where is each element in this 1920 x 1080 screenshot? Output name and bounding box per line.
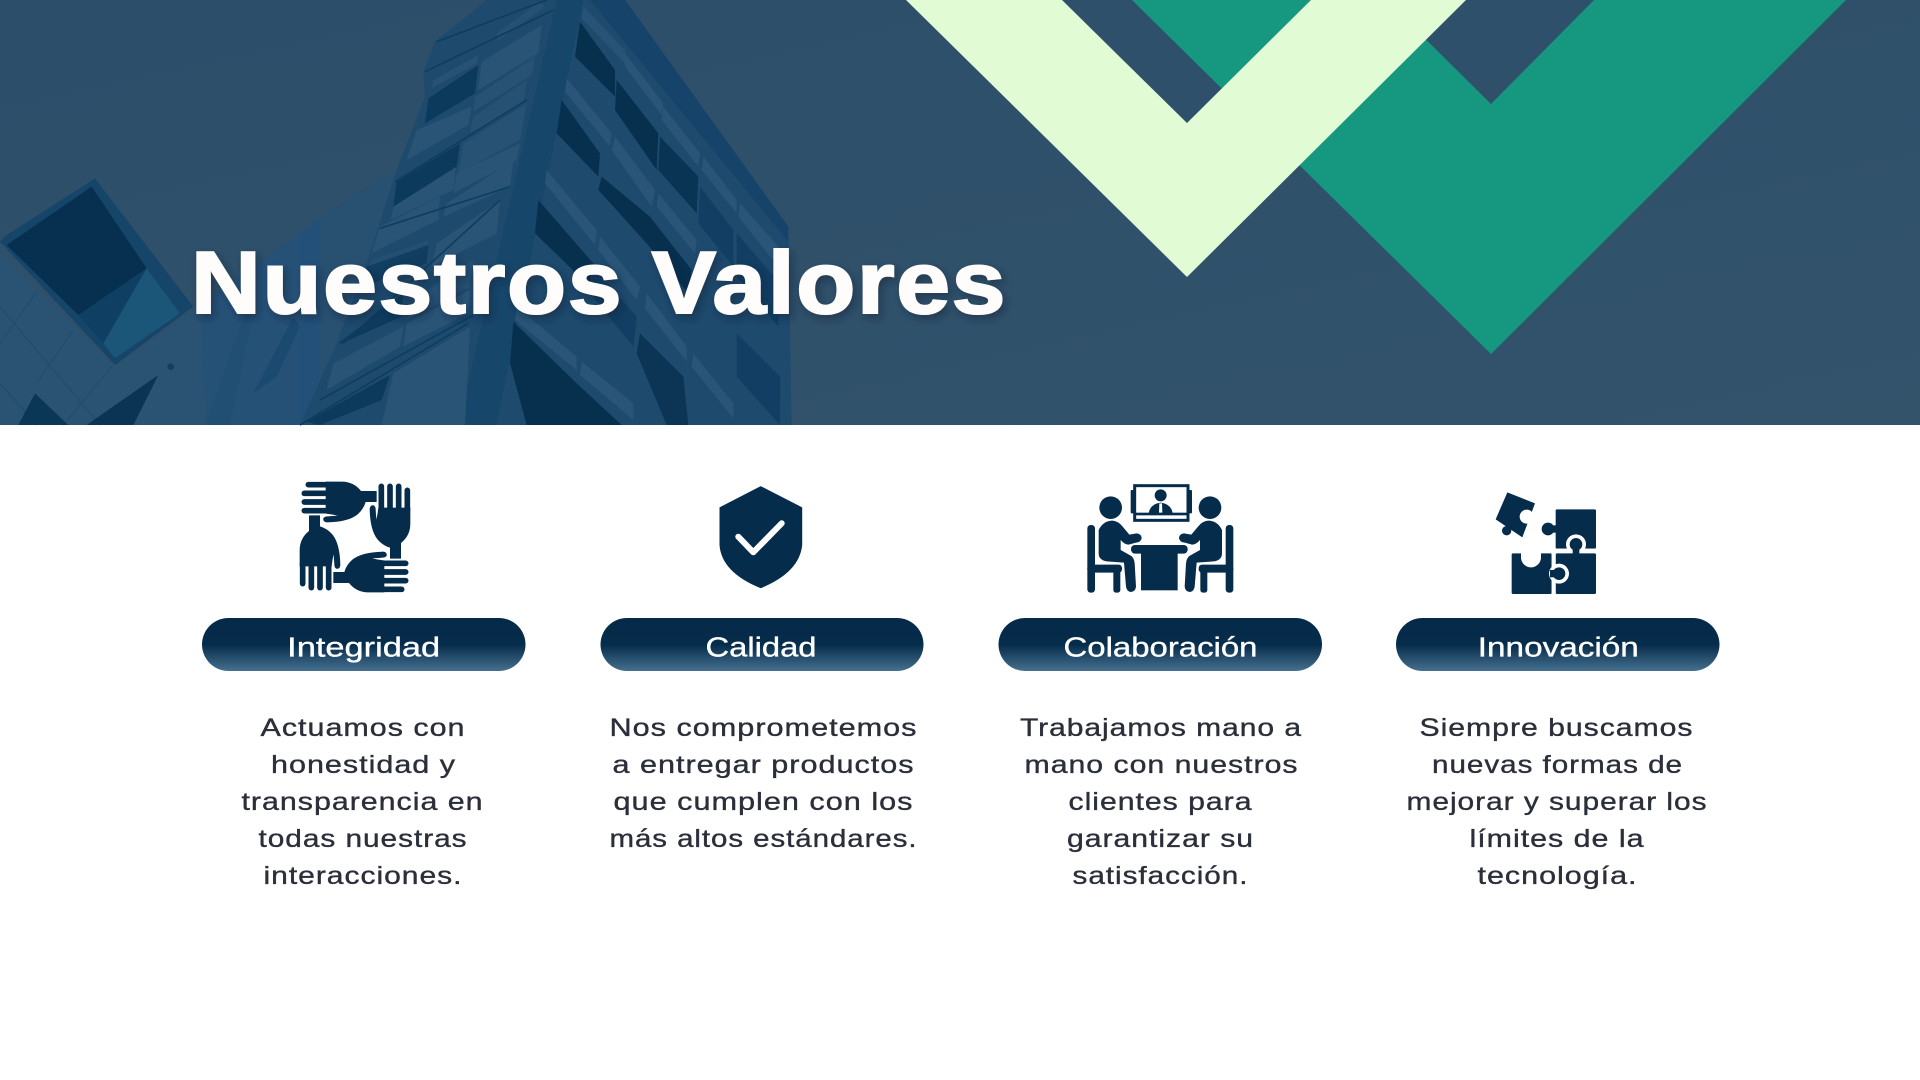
text: Innovación description: tecnología. [1478, 862, 1638, 890]
table [1131, 545, 1188, 590]
column: Colaboración [998, 486, 1322, 890]
title: Nuestros Valores [191, 233, 1007, 332]
pill: Colaboración [998, 618, 1322, 671]
loose top-left piece [1496, 492, 1535, 537]
green chevron [1132, 0, 1846, 354]
text: Integridad description: transparencia en [242, 788, 484, 816]
icon: puzzle pieces [1496, 492, 1596, 594]
monitor [1131, 486, 1192, 520]
top-right piece [1542, 509, 1596, 549]
text: Integridad description: honestidad y [271, 751, 456, 779]
text: Colaboración description [1020, 714, 1302, 890]
icon: shield with check [720, 487, 802, 588]
banner background [0, 0, 1920, 425]
text: Calidad description: que cumplen con los [614, 788, 914, 816]
column: Integridad [202, 482, 526, 890]
column: Calidad [600, 487, 924, 853]
text: Innovación description: nuevas formas de [1432, 751, 1683, 779]
text: Integridad description: interacciones. [264, 862, 462, 890]
text: Innovación description: mejorar y superar los [1406, 788, 1708, 816]
bottom-right piece [1556, 534, 1596, 594]
building photo: main tower [300, 0, 792, 425]
light mint chevron [906, 0, 1466, 277]
text: Innovación description [1406, 714, 1708, 890]
pill: Innovación: Innovación [1478, 632, 1639, 662]
right face light panels [515, 7, 780, 420]
text: Calidad description [610, 714, 918, 853]
text: Colaboración description: satisfacción. [1072, 862, 1248, 890]
text: Calidad description: más altos estándares. [610, 825, 918, 853]
person right [1179, 496, 1233, 593]
pill: Integridad: Integridad [287, 632, 440, 662]
person left [1087, 496, 1142, 593]
pill: Integridad [202, 618, 526, 671]
pill: Colaboración: Colaboración [1064, 632, 1258, 662]
text: Innovación description: Siempre buscamos [1420, 714, 1694, 742]
icon: four hands [300, 482, 410, 592]
pill: Calidad [600, 618, 924, 671]
text: Colaboración description: Trabajamos mano a [1020, 714, 1302, 742]
text: Integridad description: Actuamos con [260, 714, 466, 742]
left face panels [327, 2, 545, 425]
column: Innovación [1396, 492, 1720, 890]
header banner [0, 0, 1920, 425]
text: Calidad description: Nos comprometemos [610, 714, 918, 742]
text: Colaboración description: clientes para [1068, 788, 1252, 816]
text: Integridad description [242, 714, 484, 890]
building photo: lower left block [0, 178, 320, 425]
icon: video meeting [1087, 486, 1233, 593]
pill: Calidad: Calidad [706, 632, 816, 662]
pill: Innovación [1396, 618, 1720, 671]
bottom-left piece [1512, 547, 1569, 594]
text: Innovación description: límites de la [1470, 825, 1644, 853]
right face dark bands [510, 22, 698, 425]
text: Colaboración description: garantizar su [1067, 825, 1254, 853]
text: Calidad description: a entregar productos [612, 751, 914, 779]
text: Integridad description: todas nuestras [258, 825, 468, 853]
text: Colaboración description: mano con nuestros [1024, 751, 1298, 779]
